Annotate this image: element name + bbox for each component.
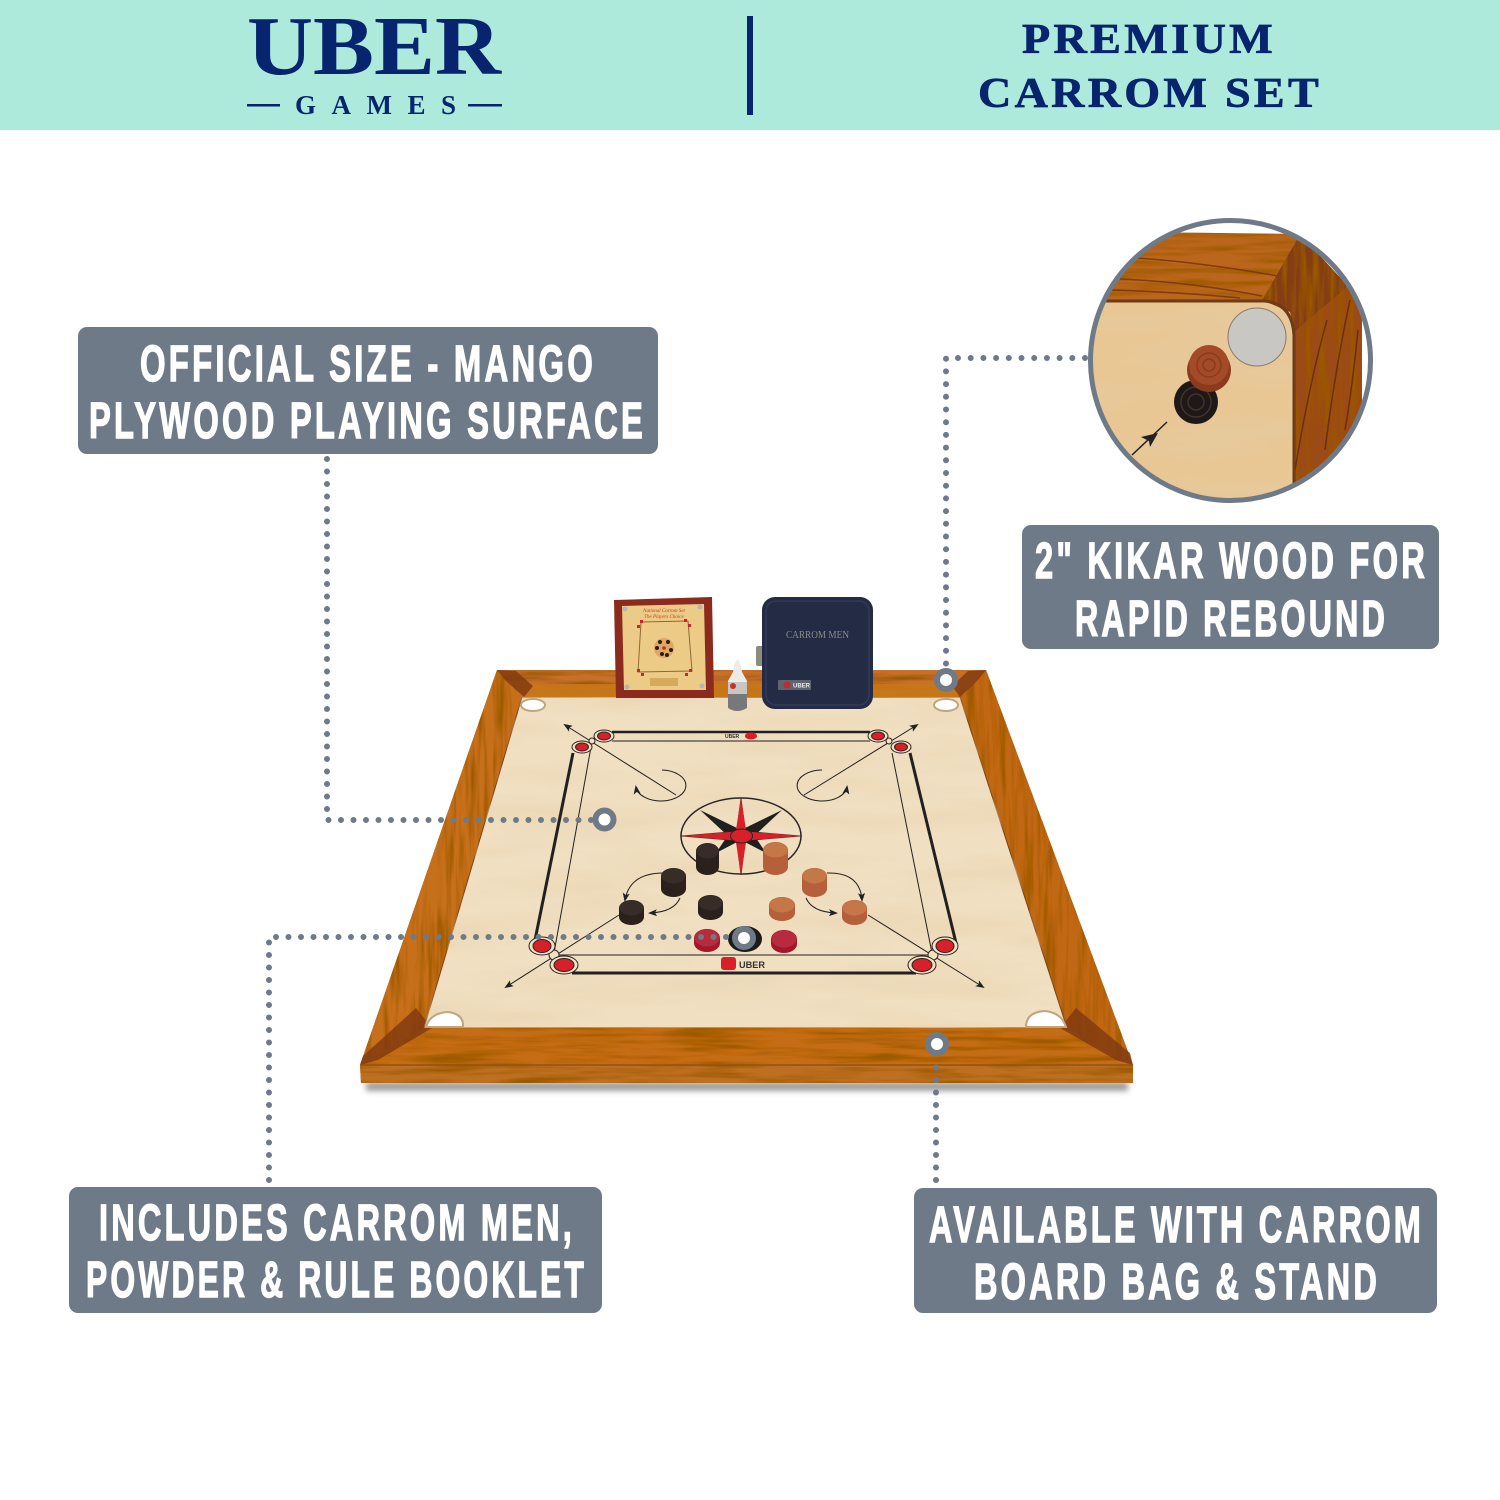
carrom men bag (756, 597, 873, 709)
board markings (506, 725, 983, 987)
mitre joints (360, 670, 1133, 1065)
inset ring (1090, 220, 1370, 500)
inset wood side rail (1294, 287, 1362, 500)
powder bottle (728, 660, 747, 711)
inset wood top rail (1107, 232, 1296, 300)
carrom board photo illustration (360, 597, 1133, 1091)
leader: accessories (269, 929, 753, 1180)
inset wood mitre (1262, 240, 1347, 331)
callout: available (914, 1188, 1437, 1313)
inset black man (1174, 380, 1218, 424)
diagonal arrows (565, 725, 676, 795)
carrom men bag: UBER (793, 684, 811, 690)
header title: CARROM SET (978, 71, 1322, 117)
header title: PREMIUM (1022, 17, 1276, 63)
board logos (721, 732, 765, 970)
rule booklet (614, 597, 714, 698)
callout: includes: INCLUDES CARROM MEN, (99, 1194, 575, 1251)
callout: official size: OFFICIAL SIZE - MANGO (140, 335, 596, 392)
front edge shadow line (361, 1064, 1133, 1066)
brand logo: Uber Games: GAMES (295, 90, 456, 120)
callout: official size (78, 327, 658, 454)
frame rail: bottom (360, 1028, 1133, 1065)
leader: stand and bag (928, 1035, 946, 1180)
inset rail grain lines (1110, 258, 1284, 298)
inset brown man (1187, 345, 1231, 392)
baseline rectangle lines (506, 725, 983, 987)
inset arrow (1132, 422, 1167, 455)
board logos: UBER (725, 734, 740, 740)
inset pocket (1228, 308, 1286, 366)
board logos: UBER (739, 960, 765, 970)
board shadow (366, 1082, 1128, 1091)
front edge (360, 1065, 1133, 1083)
rule booklet: National Carrom Set (642, 609, 685, 614)
inset side rail grain lines (1295, 300, 1358, 470)
red men (694, 929, 797, 953)
striker (728, 926, 762, 952)
rule booklet: The Players Choice (644, 615, 684, 620)
board frame outer (360, 670, 1133, 1083)
leader: kikar wood (937, 358, 1085, 689)
carrom men bag: CARROM MEN (786, 629, 849, 641)
header divider (747, 16, 753, 115)
arcs (636, 770, 686, 801)
frame rail: right (960, 670, 1133, 1065)
inset detail: kikar wood corner (1085, 218, 1372, 510)
base circles (529, 730, 958, 974)
brown men (763, 842, 867, 925)
header band (0, 0, 1500, 130)
carrom men (619, 842, 867, 953)
brand logo: Uber Games: UBER (247, 0, 502, 93)
header title (978, 17, 1322, 117)
leader: surface (327, 459, 614, 828)
black men (619, 843, 723, 925)
callout: official size: PLYWOOD PLAYING SURFACE (89, 392, 646, 449)
inset wood surface (1093, 302, 1292, 498)
frame rail: top (497, 670, 986, 697)
playing surface (424, 697, 1067, 1028)
callout: includes: POWDER & RULE BOOKLET (86, 1251, 587, 1308)
centre star (681, 798, 801, 875)
corner pockets (426, 699, 1066, 1027)
frame rail: left (360, 670, 521, 1065)
callout: kikar wood (1022, 525, 1439, 649)
callout: includes (69, 1187, 602, 1313)
